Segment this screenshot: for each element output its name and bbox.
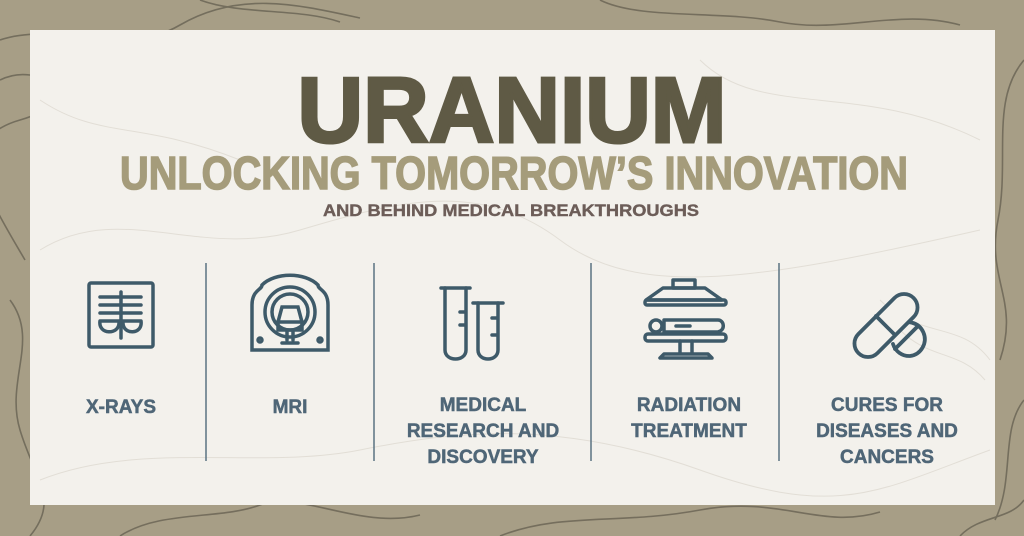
subtitle: UNLOCKING TOMORROW’S INNOVATION	[120, 147, 908, 199]
labels: RADIATION	[637, 395, 741, 416]
title: URANIUM	[298, 58, 726, 162]
labels: TREATMENT	[631, 421, 747, 442]
labels: DISEASES AND	[816, 421, 958, 442]
labels: MEDICAL	[440, 395, 527, 416]
labels: MRI	[273, 397, 307, 418]
icon: radiation treatment	[645, 280, 726, 358]
tagline: AND BEHIND MEDICAL BREAKTHROUGHS	[323, 201, 699, 220]
icon: pills	[849, 288, 925, 363]
icon: test tubes	[441, 288, 503, 359]
labels: X-RAYS	[86, 397, 156, 418]
labels: CURES FOR	[831, 395, 943, 416]
labels	[86, 395, 958, 468]
labels: DISCOVERY	[427, 447, 539, 468]
labels: CANCERS	[840, 447, 934, 468]
labels: RESEARCH AND	[407, 421, 559, 442]
icon: x-ray	[89, 283, 153, 347]
icon: MRI	[252, 275, 328, 350]
